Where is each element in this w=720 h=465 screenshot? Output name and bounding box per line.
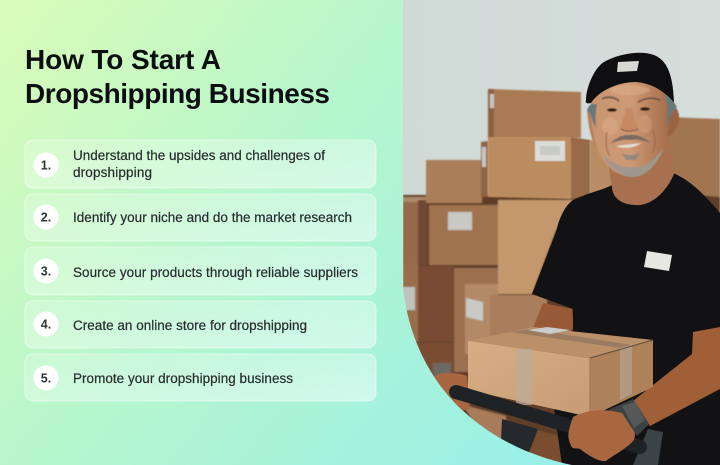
- forehead highlight: [610, 85, 650, 95]
- cap label: [617, 61, 639, 72]
- step 1 card: Understand the upsides and challenges of: [73, 148, 325, 163]
- step 2 card: 2.: [41, 210, 51, 224]
- beard: [602, 148, 664, 177]
- trolley handle: [456, 392, 640, 447]
- box label: [528, 327, 570, 334]
- packing tape: [516, 349, 532, 405]
- step 2 card: [25, 194, 376, 241]
- left arm: [533, 303, 574, 332]
- cap: [586, 53, 674, 103]
- step 3 card: Source your products through reliable suppliers: [73, 265, 358, 280]
- step 1 card: [25, 140, 376, 188]
- title: How To Start A: [25, 44, 221, 75]
- mouth: [616, 143, 641, 148]
- step 5 card: [25, 354, 376, 401]
- trolley stand: [501, 419, 538, 455]
- cheek lines: [606, 132, 610, 156]
- main mid box: [488, 137, 590, 199]
- shirt: [532, 173, 720, 465]
- right forearm: [633, 327, 720, 426]
- stacked background boxes: [403, 89, 720, 465]
- right hand: [568, 410, 635, 461]
- title: Dropshipping Business: [25, 78, 330, 109]
- carried cardboard box: [468, 327, 653, 417]
- eyebrows: [602, 97, 619, 101]
- hair: [587, 104, 597, 128]
- step list: [25, 140, 376, 401]
- photo: delivery man holding a box: [403, 0, 720, 465]
- step 5 card: Promote your dropshipping business: [73, 371, 293, 386]
- head: [591, 77, 669, 177]
- wrist watch: [608, 399, 649, 436]
- wall: [403, 0, 720, 465]
- title: [25, 44, 330, 109]
- chest label: [644, 251, 672, 271]
- ears: [586, 110, 596, 146]
- left hand: [433, 373, 470, 412]
- step 1 card: dropshipping: [73, 165, 152, 180]
- step 3 card: 3.: [41, 264, 51, 278]
- face: [587, 77, 679, 177]
- step 5 card: 5.: [41, 372, 51, 386]
- step 3 card: [25, 247, 376, 295]
- step 2 card: Identify your niche and do the market research: [73, 210, 352, 225]
- step 4 card: [25, 301, 376, 348]
- step 4 card: 4.: [41, 318, 51, 332]
- step 4 card: Create an online store for dropshipping: [73, 318, 307, 333]
- nose: [620, 108, 638, 132]
- eyes: [607, 108, 617, 112]
- step 1 card: 1.: [41, 158, 51, 172]
- mustache: [610, 135, 650, 144]
- neck: [608, 136, 674, 206]
